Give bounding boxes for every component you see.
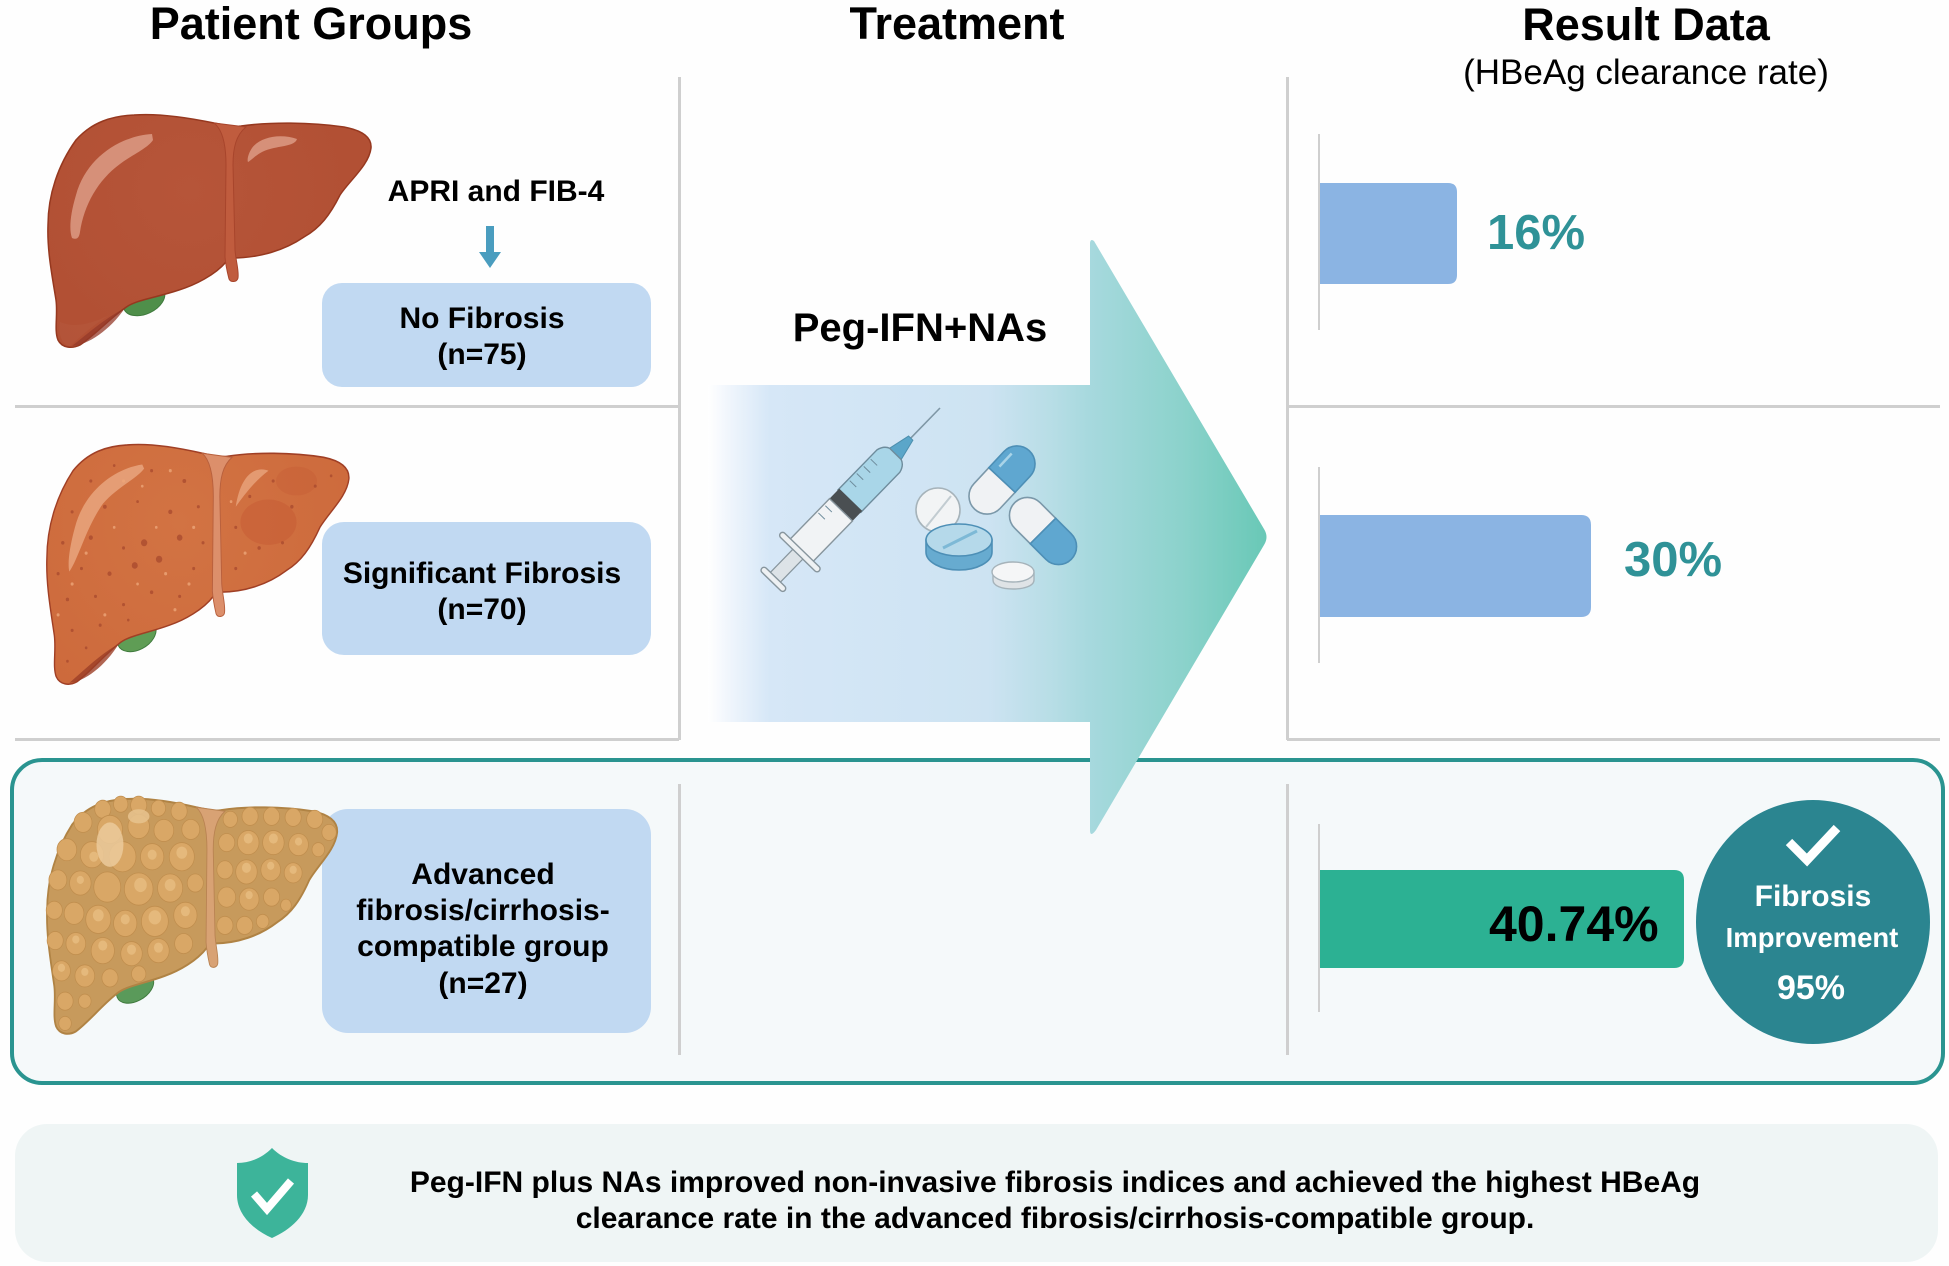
bar chart: 30 percent: 30% [1624,533,1722,587]
text: conclusion statement: Peg-IFN plus NAs improved non-invasive fibrosis indices and achieved the highest HBeAg [410,1166,1700,1199]
blue disc tablet [926,524,992,570]
callout: fibrosis improvement [1696,800,1930,1044]
bar chart: 16 percent [1318,134,1585,330]
icon: check [1789,828,1837,860]
subtitle: HBeAg clearance rate: (HBeAg clearance rate) [1463,53,1829,92]
label: APRI and FIB-4: APRI and FIB-4 [388,175,605,208]
bar chart: 40.74 percent: 40.74% [1489,896,1659,952]
box: No Fibrosis: (n=75) [437,338,527,371]
label: Peg-IFN+NAs: Peg-IFN+NAs [793,306,1047,350]
panel: conclusion [15,1124,1938,1262]
callout: fibrosis improvement: Fibrosis [1755,880,1871,913]
small white tablet [992,562,1034,589]
second capsule [1002,490,1084,572]
box: Advanced fibrosis/cirrhosis-compatible group: Advanced [411,858,555,891]
box: Advanced fibrosis/cirrhosis-compatible group: (n=27) [438,967,528,1000]
box: No Fibrosis [322,283,651,387]
icon: cirrhotic liver [46,796,337,1034]
callout: fibrosis improvement: Improvement [1726,922,1898,953]
box: Significant Fibrosis [322,522,651,655]
text: conclusion statement: clearance rate in the advanced fibrosis/cirrhosis-compatible group. [576,1202,1534,1235]
icon: pills [916,438,1084,589]
bar chart: 30 percent [1318,467,1722,663]
blue capsule [962,438,1042,522]
icon: syringe [752,389,959,600]
icon: fibrotic liver [47,444,349,684]
icon: healthy liver [48,115,371,347]
title: Result Data [1463,0,1829,92]
title: Result Data: Result Data [1522,0,1771,50]
panel: significant fibrosis patient group [47,444,651,684]
panel: advanced fibrosis patient group [46,796,651,1034]
box: Significant Fibrosis: (n=70) [437,593,527,626]
arrow: down [479,226,501,268]
text: conclusion statement [410,1166,1700,1235]
arrow: treatment flow [708,240,1266,834]
box: Advanced fibrosis/cirrhosis-compatible group: compatible group [357,930,609,963]
callout: fibrosis improvement: 95% [1777,969,1845,1007]
panel: no fibrosis patient group [48,115,651,387]
icon: shield check [237,1148,308,1238]
bar chart: 40.74 percent [1318,824,1684,1012]
box: Advanced fibrosis/cirrhosis-compatible group: fibrosis/cirrhosis- [356,894,610,927]
white round tablet [916,488,960,532]
panel: highlighted advanced fibrosis row [12,760,1943,1083]
bar chart: 16 percent: 16% [1487,206,1585,260]
box: Advanced fibrosis/cirrhosis-compatible group [322,809,651,1033]
box: No Fibrosis: No Fibrosis [399,302,565,335]
grid lines [15,77,1940,1055]
box: Significant Fibrosis: Significant Fibrosis [343,557,621,590]
